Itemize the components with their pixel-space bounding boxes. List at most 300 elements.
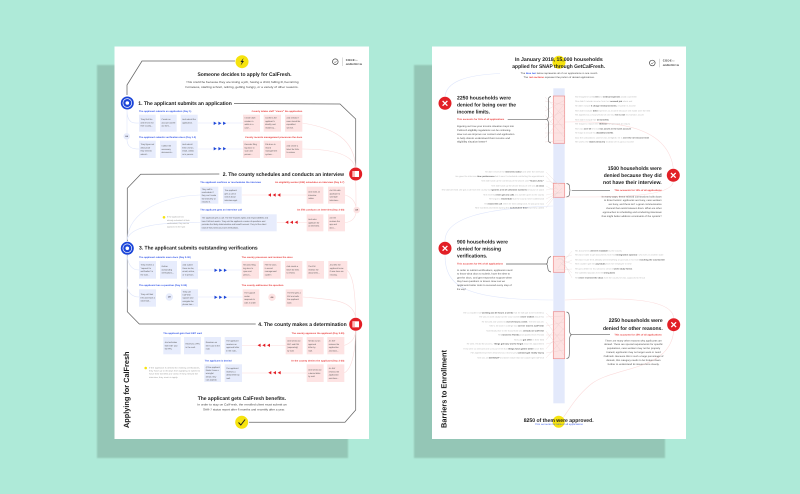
heading: 2. The county schedules and conducts an interview bbox=[223, 172, 345, 178]
step 1: The applicant submits verification docs (Day 1-3) bbox=[139, 136, 196, 139]
cards: row 1: And activates bbox=[165, 341, 177, 344]
cards: row 1: the interview or bbox=[202, 197, 216, 200]
flow curves bbox=[127, 110, 356, 373]
arrows bbox=[214, 147, 226, 150]
cards: row 2: The EW gets a bbox=[287, 292, 302, 294]
note bbox=[144, 366, 201, 379]
cards: row 2: them via fax, bbox=[182, 146, 194, 149]
cards: row 2: center bbox=[244, 295, 250, 298]
cards: row 2: the applicant bbox=[287, 298, 299, 301]
heading: someone decides: Someone decides to apply for CalFresh. bbox=[198, 72, 292, 78]
title: The red sections represent the portion of denied applications. bbox=[524, 76, 595, 79]
heading: 2250 households were bbox=[609, 318, 663, 324]
paragraph: Figuring out how your income situation maps into bbox=[457, 125, 515, 128]
title: In January 2018, 15,000 households bbox=[515, 57, 603, 63]
cards: row 2: navigate the bbox=[182, 300, 195, 303]
cards: row 2: Records filing bbox=[244, 143, 257, 146]
cards: row 1: outstanding bbox=[162, 268, 172, 271]
icon: red x bbox=[438, 242, 452, 255]
heading: 1500 households were bbox=[608, 166, 662, 172]
cards: row 1: notice. bbox=[308, 197, 315, 200]
cards: row 1: EBT card in the bbox=[206, 344, 221, 347]
cards: row 2 bbox=[139, 141, 302, 158]
cards: row 2: back bbox=[287, 301, 293, 304]
cards: row 1: in the mail. bbox=[186, 346, 196, 349]
note: approved in the spot bbox=[167, 225, 186, 228]
cards: row 1: seBis in a bbox=[244, 123, 254, 126]
cards: row 1: And lets the bbox=[330, 264, 341, 266]
paragraph: that might better address constraints of the system? bbox=[602, 215, 662, 218]
panel shadows bbox=[97, 65, 665, 458]
paragraph: eligibility situation better? bbox=[457, 141, 488, 144]
cards: row 2: An EW bbox=[330, 216, 336, 220]
cards: row 2: EW and calls bbox=[287, 295, 299, 298]
closing text: benefits: In order to stay on CalFresh, the enrolled client must submit an bbox=[197, 403, 287, 407]
block: other reasons: This accounts for 15% of all applications bbox=[614, 334, 662, 336]
arrows bbox=[214, 122, 226, 125]
reasons list: She recently never got any calls at a number given to the county bbox=[483, 193, 545, 196]
or circle: OR bbox=[125, 135, 129, 138]
step 4 bbox=[144, 318, 362, 382]
arrows bbox=[258, 344, 270, 347]
paragraph bbox=[602, 196, 663, 218]
reasons list: She didn't include debt expenses as income because she made over the limit bbox=[575, 109, 651, 112]
cards: row 1: Gather bbox=[162, 265, 168, 268]
icon: county bbox=[349, 318, 362, 331]
cards: row 1: and docs... bbox=[329, 349, 339, 352]
step 3: The applicant submits more docs (Day 3-30) bbox=[139, 256, 191, 259]
reasons list: She didn't pick up the call because the phone said "Scam Likely." bbox=[481, 180, 544, 183]
reasons list: He wasn't sure if he already sent everything or just had a mix from reaching the caseworker bbox=[575, 258, 665, 261]
icon: red x bbox=[667, 169, 680, 182]
closing: approved bbox=[524, 416, 594, 428]
block: missed interview: This accounts for 10% of all applications bbox=[614, 189, 662, 192]
cards: row 1: An EW bbox=[329, 340, 335, 342]
paragraph: CalFresh. Because this is such a large percentage of bbox=[604, 355, 664, 358]
cards: row 1: application. bbox=[182, 121, 193, 124]
paragraph: to help clients understand their income and bbox=[457, 137, 511, 140]
icon: red x bbox=[667, 318, 680, 331]
reasons list: He got a letter for his school to send in work study forms bbox=[575, 267, 633, 270]
icon: county bbox=[349, 168, 362, 180]
reasons list: She's 20 and in college but on her mom's CalFresh bbox=[489, 325, 545, 328]
cards: row 2 bbox=[139, 289, 303, 307]
paragraph: There are many other reasons why applicants are bbox=[605, 340, 663, 342]
cards: row 2: and docs... bbox=[329, 377, 339, 380]
cards: row 1: interview... bbox=[330, 199, 340, 202]
cards: row 2: docs... bbox=[330, 226, 336, 229]
paragraph: populations, case workers may not be properly bbox=[607, 347, 661, 350]
paragraph: to know what docs to submit, have the time to bbox=[457, 272, 511, 276]
logo: code for america: AMERICA bbox=[346, 63, 362, 66]
heading bbox=[603, 166, 662, 186]
cards: row 1: mail. bbox=[206, 348, 211, 351]
cards: row 2: They call their bbox=[140, 293, 154, 296]
reasons list: She couldn't get her paystubs from her employer in time bbox=[575, 263, 633, 266]
cards: row 2: email, online, bbox=[182, 150, 195, 153]
paragraph: trained, applicants may no longer want or need bbox=[606, 351, 661, 354]
reasons list: She didn't include income from her second job when ask bbox=[575, 100, 633, 103]
cards: row 1: reviews the bbox=[308, 268, 319, 271]
cards: row 1: missed it. bbox=[202, 200, 211, 203]
panel: Applying for CalFresh bbox=[114, 46, 369, 439]
closing text: benefits bbox=[197, 396, 287, 411]
cards: row 1: application bbox=[329, 346, 339, 349]
icon: applicant bbox=[121, 96, 134, 110]
cards: row 1: letter by bbox=[308, 346, 316, 349]
cards: row 2: application bbox=[329, 374, 339, 377]
closing text: benefits: SAR-7 status report after 6 months and recertify after a year. bbox=[203, 407, 285, 411]
cards: row 1: approval bbox=[308, 343, 317, 346]
logo: code for america: CODE bbox=[663, 58, 672, 62]
paragraph bbox=[604, 340, 664, 366]
title: applied for SNAP through GetCalFresh. bbox=[512, 64, 606, 70]
paragraph bbox=[457, 269, 513, 291]
reasons list: He didn't include 3 charge reimbursements , resulted his income bbox=[575, 105, 637, 108]
cards: row 1: log docs to bbox=[243, 267, 254, 270]
arrows bbox=[214, 296, 227, 299]
cards: row 2: submit... bbox=[140, 153, 149, 156]
paragraph: approaches to scheduling and conducting interviews bbox=[603, 211, 663, 214]
cards: row 1: creates in bbox=[244, 120, 253, 123]
cards: row 2: record bbox=[265, 146, 271, 149]
logo: code for america: for bbox=[672, 60, 675, 62]
cards: row 2: to review. bbox=[286, 151, 296, 154]
cards: row 2: They call bbox=[182, 290, 191, 294]
cards: row 1: reschedule if bbox=[202, 191, 214, 194]
cards: row 2: support and bbox=[182, 297, 193, 300]
reasons list bbox=[442, 171, 545, 210]
step 2 bbox=[163, 168, 362, 231]
cards: row 2: wrongful bbox=[206, 372, 214, 375]
cards: row 1: And sends out bbox=[287, 340, 301, 342]
or circle: OR bbox=[355, 209, 359, 212]
cards: row 2: (If the applicant bbox=[206, 366, 220, 369]
heading: denied for missing bbox=[457, 246, 501, 252]
paragraph: to three factors: applicants are busy, case workers bbox=[604, 199, 663, 202]
cards: row 1: applicant's bbox=[265, 120, 275, 123]
journey connector lines bbox=[127, 61, 356, 422]
red section 3 bbox=[553, 251, 572, 278]
cards: row 1 bbox=[139, 115, 302, 132]
cards: row 1: File the docs bbox=[265, 264, 276, 266]
cards: row 1: online form for bbox=[140, 121, 154, 124]
paragraph: channel that exists between them. What are other bbox=[606, 207, 662, 210]
cards: row 2: File docs in bbox=[265, 143, 276, 146]
paragraph: applicants better tools to succeed every step of bbox=[457, 284, 512, 287]
logo: code for america: AMERICA bbox=[663, 64, 679, 67]
heading: denied for being over the bbox=[457, 102, 516, 108]
block: over income bbox=[438, 96, 651, 144]
cards: row 2: denial letter by bbox=[226, 374, 240, 377]
paragraph: are busy, and there isn't a great communication bbox=[608, 203, 662, 206]
heading: income limits. bbox=[457, 110, 491, 116]
note: If the applicant has bbox=[167, 216, 184, 219]
or circle bbox=[353, 207, 360, 213]
reasons list: He forgot to reschedule but the county never called back bbox=[489, 198, 545, 201]
cards: row 2: scan and bbox=[244, 150, 253, 153]
cards: row 2: how CalFresh works. They ask the applicant a series of questions and bbox=[202, 220, 265, 223]
cards: row 1: Confirms the bbox=[265, 116, 278, 120]
block: missing verifications bbox=[438, 240, 665, 291]
cards: row 2: thinks it was a bbox=[206, 369, 220, 372]
cards: row 2: phone tree... bbox=[182, 303, 194, 306]
cards: row 2: They figure out bbox=[140, 143, 155, 146]
cards: row 2 bbox=[204, 364, 344, 382]
cards: row 2: necessary bbox=[162, 148, 172, 151]
cards: row 1: out form... bbox=[162, 125, 171, 128]
cards: row 2: And sends out bbox=[308, 368, 322, 372]
reasons list: She doesn't think she got a call from the county but ignores a lot of unknown numbers because of spam bbox=[442, 189, 544, 192]
reasons list: She was over 60 limit but has assets in the bank account bbox=[575, 127, 631, 130]
reasons list: He never received the docs from the county he was supposed to fill out bbox=[575, 276, 645, 279]
cards: row 1: Sends out an bbox=[308, 340, 320, 342]
cards: row 2: log docs to bbox=[244, 146, 255, 149]
red section 4 bbox=[546, 312, 565, 359]
logo: code for america: CODE bbox=[346, 58, 355, 62]
cards: row 1: ticket for EWs bbox=[286, 268, 299, 271]
cards: row 1: their EBT and bbox=[165, 344, 177, 347]
step 1: County intake staff "clears" the application bbox=[252, 110, 303, 113]
cards: row 2: can appeal) bbox=[206, 378, 217, 381]
reasons list: She thought he owed rent and medical expenses would count them bbox=[575, 96, 637, 99]
cards: row 1: the mail... bbox=[140, 273, 150, 276]
cards: row 2: provides the likely determination and benefit amount. They let the client bbox=[202, 223, 267, 226]
cards: row 2: ticket for EWs bbox=[286, 148, 299, 151]
heading: someone decides: This could be because they are losing a job, having a child, falling ill, becoming bbox=[186, 80, 299, 84]
cards: row 2: The support bbox=[244, 292, 256, 294]
cards: row 2: documents... bbox=[162, 151, 174, 154]
cards: row 1: interview bbox=[308, 194, 317, 197]
icon: lightning start bbox=[236, 55, 248, 68]
paragraph: How can we improve our content and application bbox=[457, 133, 515, 136]
reasons list: She didn't include her 40 benefits bbox=[575, 118, 610, 121]
cards: row 2: system... bbox=[265, 153, 274, 156]
heading: not have their interview. bbox=[603, 180, 662, 186]
block: missed interview bbox=[442, 166, 680, 218]
cards: row 1: applicant know bbox=[330, 267, 344, 270]
cards: row 1: account and fill bbox=[162, 121, 176, 124]
cards: row 1: And submit bbox=[182, 264, 193, 266]
cards: row 1: documents... bbox=[308, 272, 320, 275]
note: already submitted all their bbox=[167, 219, 190, 222]
cards: row 1: "request for bbox=[140, 267, 151, 270]
icon: red x bbox=[438, 97, 452, 110]
cards: row 1: in the mail... bbox=[226, 349, 238, 352]
paragraph: In order to submit verifications, applicants need bbox=[457, 269, 513, 272]
reasons list: She submitted paystubs from the wrong dates bbox=[575, 272, 616, 275]
step 3: The county processes and reviews the docs bbox=[242, 256, 293, 259]
cards: row 2: responds to bbox=[244, 298, 256, 301]
heading: 2250 households were bbox=[457, 96, 511, 102]
cards: row 1: mail. bbox=[308, 349, 313, 352]
cards: row 2: OR bbox=[168, 296, 171, 299]
cards: row 1: And create a bbox=[286, 265, 299, 268]
cards: row 2: Collect the bbox=[162, 144, 172, 148]
cards: row 1: system bbox=[265, 273, 272, 276]
cards: row 1: their county... bbox=[140, 125, 153, 128]
arrows bbox=[268, 371, 281, 374]
reasons list: He was in work study but the case worker never visited about this bbox=[479, 316, 544, 319]
cards: row 2: mail. bbox=[226, 377, 231, 380]
cards: row 1: The applicant bbox=[226, 340, 239, 342]
yellow dot behind title bbox=[552, 56, 566, 69]
step 4: The county approves the applicant (Day 3-30) bbox=[292, 332, 345, 335]
logo: code for america: for bbox=[355, 59, 358, 62]
reasons list: His documents weren't readable by the county bbox=[575, 249, 623, 252]
cards: row 2: what proof bbox=[140, 146, 150, 149]
cards: row 2: EW and leave a bbox=[140, 296, 156, 299]
step 2: The applicant gets an interview call bbox=[200, 208, 242, 211]
cards: row 2: by mail. bbox=[308, 375, 316, 378]
cards: row 1: And mails an bbox=[308, 190, 320, 194]
cards: row 1: The EW bbox=[308, 265, 316, 268]
heading bbox=[457, 240, 508, 260]
cards: row 2: reviews the bbox=[330, 220, 341, 223]
reasons list bbox=[575, 249, 665, 279]
cards: row 2: app and bbox=[330, 223, 337, 226]
step 1: County records management processes the docs bbox=[245, 136, 303, 139]
cards: row 1: Create draft bbox=[244, 116, 256, 120]
reasons list: He went. He did the process. Things got busy and he forgot about the appointment bbox=[467, 343, 544, 346]
step 4: Or the county denies the applicant (Day 3-30) bbox=[291, 359, 345, 362]
cards: row 1: They call to bbox=[202, 188, 213, 191]
cards: row 2 bbox=[200, 214, 345, 231]
cards: row 1: (separately) bbox=[287, 346, 298, 349]
step 3 bbox=[121, 242, 347, 307]
reasons list: He forgot to include his disability benefits bbox=[575, 132, 614, 135]
cards: row 1: spas and bbox=[243, 270, 252, 273]
cards: row 2: reviews the bbox=[329, 370, 340, 373]
cards: row 2: person... bbox=[244, 153, 253, 156]
step 2: The applicant confirms or reschedules the interview bbox=[200, 181, 261, 184]
cards: row 1: And checks if bbox=[286, 116, 299, 120]
cards: row 1: they can't make bbox=[202, 194, 217, 197]
reasons list: Also the calculations said he was ineligible, he is over the net income limit bbox=[575, 136, 649, 139]
cards: row 1: management bbox=[265, 270, 277, 273]
cards: row 2: an interview. bbox=[308, 225, 320, 228]
cards: row 2: CalFresh bbox=[182, 294, 191, 297]
cards: row 2: a denial letter bbox=[308, 372, 321, 375]
step 2: An EW conducts an interview (Day 3-30) bbox=[297, 208, 345, 211]
note: have their benefits pro-rated. If they missed the bbox=[149, 373, 199, 376]
cards: row 1: missing. bbox=[330, 273, 338, 276]
cards: row 1: interview appt. bbox=[224, 199, 238, 202]
reasons list: Somebody else in the household was already on CalFresh bbox=[486, 329, 545, 332]
cards: row 2: denial, they bbox=[206, 375, 217, 378]
cards: row 1: case should be bbox=[286, 120, 301, 123]
cards: row 1: person... bbox=[243, 273, 252, 276]
heading: 1. The applicant submits an application bbox=[138, 101, 232, 107]
cards: row 1: An EW calls bbox=[330, 189, 341, 192]
reasons list: She didn't pick up the phone because she was at class bbox=[491, 184, 545, 187]
cards: row 1: identity and bbox=[265, 123, 276, 126]
or circle bbox=[124, 133, 130, 140]
cards: row 2: An EW bbox=[329, 367, 335, 370]
title bbox=[512, 57, 606, 79]
note: they have up to 30 days from applying to submit to bbox=[149, 370, 201, 372]
heading: denied for other reasons. bbox=[603, 326, 663, 332]
cards: row 2: receives a bbox=[226, 370, 236, 373]
reasons list: He moved to Florida and applied from Florida bbox=[498, 334, 545, 337]
cards: row 1: or in person. bbox=[182, 273, 194, 276]
paragraph: they have questions or issues. How can we bbox=[457, 280, 506, 283]
reasons list: They were so stressed and so busy he felt that things have gotten better since then bbox=[463, 347, 545, 350]
cards: row 2: calls in order bbox=[244, 301, 256, 304]
cards: row 2: The applicant bbox=[226, 367, 239, 370]
cards: row 2: management bbox=[265, 150, 278, 153]
cards: row 1: The applicant bbox=[224, 189, 237, 192]
heading bbox=[457, 96, 516, 116]
reasons list: She worked and tried during the scheduled time but they called bbox=[475, 207, 545, 210]
closing text: benefits: The applicant gets CalFresh benefits. bbox=[198, 396, 287, 402]
heading: someone decides bbox=[186, 72, 299, 89]
cards: row 1: They find the bbox=[140, 118, 153, 121]
paragraph: get the docs, and get responsive support when bbox=[457, 276, 513, 280]
cards: row 1: receives an bbox=[226, 343, 237, 346]
paragraph: denials, this category needs to be broken down bbox=[606, 359, 661, 362]
closing: approved: This accounts for 55% of all applications bbox=[535, 423, 584, 426]
cards: row 2: voicemail... bbox=[140, 300, 151, 303]
block: other reasons bbox=[463, 311, 680, 366]
brackets and leader lines bbox=[506, 96, 610, 358]
paragraph: further to understand its issues more clearly. bbox=[608, 363, 660, 366]
heading: someone decides: homeless, starting school, retiring, getting hungry, or a variety of other reasons. bbox=[186, 85, 299, 89]
cards: row 1: if new docs are bbox=[330, 270, 344, 273]
heading: denied because they did bbox=[604, 173, 662, 179]
reasons list bbox=[463, 311, 545, 359]
cards: row 1: case... bbox=[244, 126, 251, 129]
heading: verifications. bbox=[457, 254, 488, 260]
paragraph: denied. There are special requirements for specific bbox=[604, 343, 664, 346]
cards: row 1: gets a call or bbox=[224, 192, 236, 195]
cards: row 1: to review. bbox=[286, 272, 296, 275]
reasons list: She just got offer in their field bbox=[514, 338, 545, 341]
cards: row 1: email, online, bbox=[182, 270, 195, 273]
cards: row 1: Receives an bbox=[206, 341, 217, 344]
reasons list: He missed the call . When he tried calling back, he just got a busy bbox=[484, 202, 545, 205]
note: verifications, they can be bbox=[167, 222, 190, 225]
cards: row 1 bbox=[200, 187, 345, 204]
block: missing verifications: This accounts for 6% of all applications bbox=[457, 262, 504, 266]
cards: row 1: Create an bbox=[162, 118, 170, 121]
heading bbox=[603, 318, 663, 332]
reasons list: He's a student not working (so 20 hours a week) that he will quit to be homeless bbox=[463, 311, 544, 314]
blue bar bbox=[553, 88, 565, 403]
cards: row 2: they need to bbox=[140, 150, 153, 153]
reasons list: He forgot to report the lifetime he got from an injury bbox=[575, 123, 631, 126]
red section 1 bbox=[545, 96, 565, 143]
cards: row 1: residency... bbox=[265, 126, 276, 129]
step 3: The applicant has a question (Day 3-30) bbox=[139, 284, 187, 287]
cards: row 1: verification" in bbox=[140, 270, 153, 273]
cards: row 1: applicant to bbox=[330, 192, 341, 195]
reasons list: He wasn't able to get documents from his immigration sponsor , who lives in another state bbox=[575, 254, 664, 257]
note: interview, they must re-apply. bbox=[149, 376, 178, 379]
step 1: The applicant submits an application (Day 1) bbox=[139, 110, 192, 113]
red section 2 bbox=[546, 172, 565, 208]
cards: row 1: by mail. bbox=[287, 349, 295, 352]
cards: row 1: expedited bbox=[286, 123, 295, 126]
paragraph: In many ways, these missed connections boils down bbox=[602, 196, 662, 198]
flow curves bbox=[445, 74, 674, 418]
cards: row 1: in record bbox=[265, 267, 273, 270]
cards: row 1: approval letter bbox=[226, 346, 239, 349]
step 4: The applicant is denied bbox=[205, 359, 232, 362]
cards: row 2: And asks bbox=[308, 218, 317, 221]
reasons list bbox=[575, 96, 651, 144]
closing: approved: 8250 of them were approved. bbox=[524, 418, 594, 424]
